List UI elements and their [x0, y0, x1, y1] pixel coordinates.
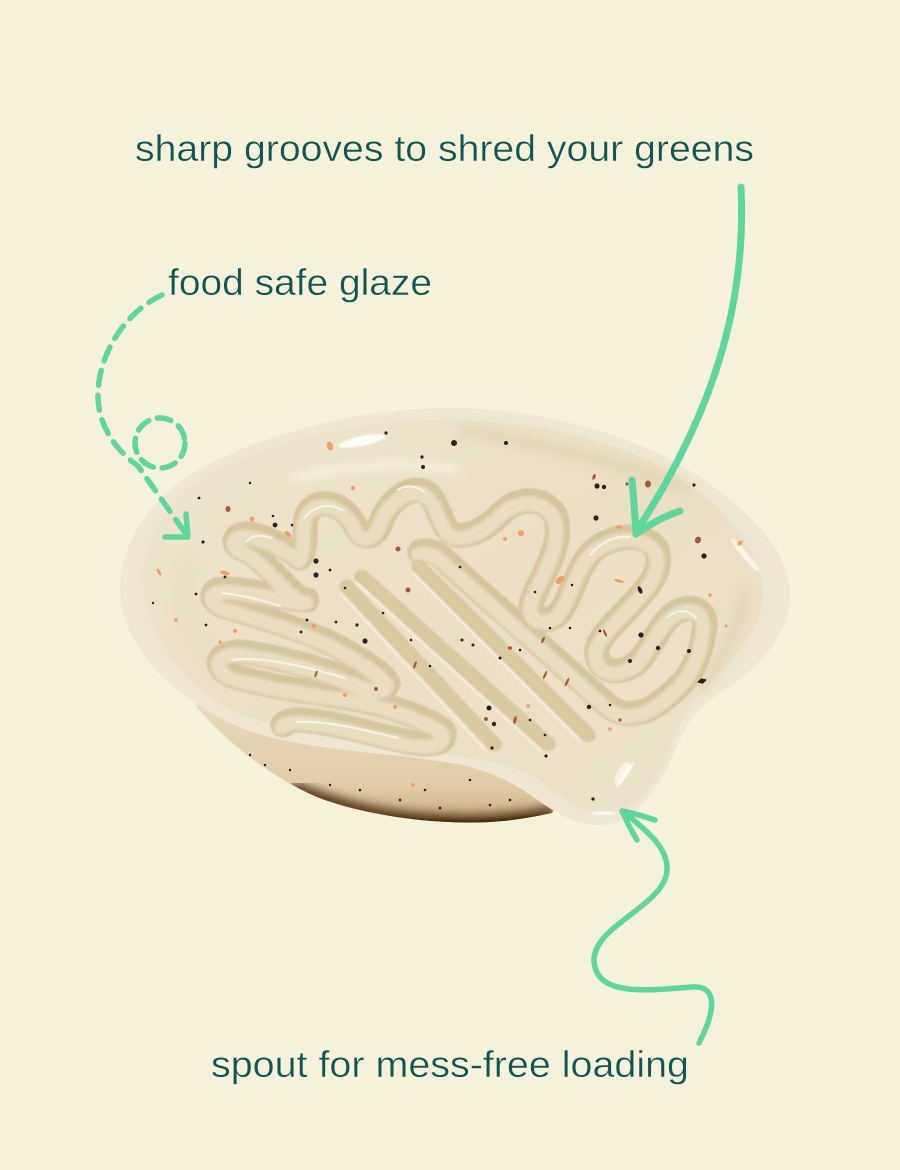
infographic canvas: [95, 134, 790, 1084]
brown speckles: [226, 474, 702, 724]
label: spout: spout for mess-free loading: [211, 1044, 689, 1085]
bowl photo: [120, 408, 790, 825]
orange speckles: [156, 441, 743, 787]
groove floor: [212, 493, 704, 747]
label: sharp grooves: sharp grooves to shred your greens: [135, 128, 754, 169]
bowl well: [143, 420, 763, 813]
speckles: [152, 431, 743, 809]
bowl rim: [120, 408, 790, 825]
bowl underside: [195, 704, 554, 822]
grooves: [212, 486, 705, 750]
groove wall shading: [213, 490, 705, 744]
label: food safe glaze: food safe glaze: [168, 262, 432, 303]
arrow: spout: [594, 811, 712, 1043]
arrow: grooves: [632, 187, 742, 534]
glossy reflections on rim: [337, 431, 761, 814]
black speckles: [152, 431, 707, 809]
upper wall shading: [184, 430, 745, 690]
finger channel light edges: [341, 573, 580, 750]
finger channels: [347, 567, 588, 744]
arrow: food safe glaze (dashed): [98, 295, 188, 537]
glaze highlights: [222, 486, 696, 738]
